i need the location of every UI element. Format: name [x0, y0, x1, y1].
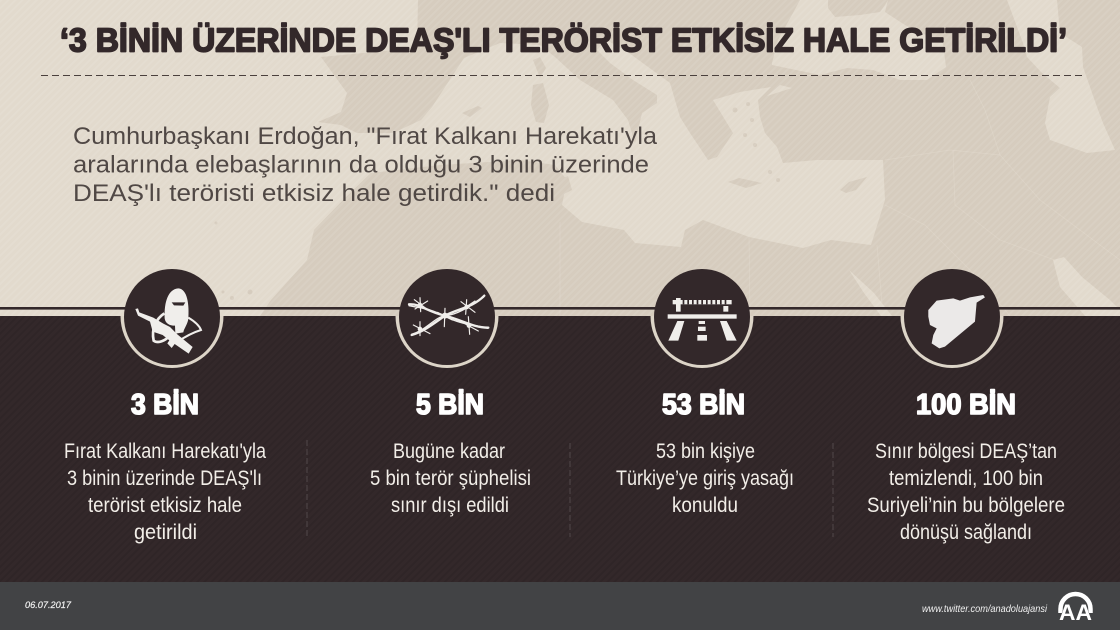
column 4: 100 BİN: 100 BİN	[916, 389, 1016, 421]
column 3: 53 BİN: konuldu	[672, 494, 738, 517]
column 4: 100 BİN: dönüşü sağlandı	[900, 521, 1032, 544]
column 1: 3 BİN: 3 binin üzerinde DEAŞ'lı	[67, 467, 262, 490]
column 1: 3 BİN: terörist etkisiz hale	[88, 494, 242, 517]
column 2: 5 BİN: 5 bin terör şüphelisi	[370, 467, 531, 490]
column 3: 53 BİN: Türkiye’ye giriş yasağı	[616, 467, 794, 490]
panel: map background	[0, 0, 1120, 316]
footer twitter address: www.twitter.com/anadoluajansi	[922, 603, 1048, 615]
icon: masked militant with rifle	[120, 269, 224, 368]
icon: barbed wire	[396, 269, 498, 368]
column 3: 53 BİN	[616, 389, 794, 517]
icon: road barrier	[650, 269, 754, 368]
intro paragraph: Cumhurbaşkanı Erdoğan, "Fırat Kalkanı Harekatı'yla	[73, 123, 658, 150]
panel: footer bar	[0, 582, 1120, 630]
column 4: 100 BİN: temizlendi, 100 bin	[889, 467, 1043, 490]
icon: Anadolu Agency logo: AA	[1059, 600, 1092, 625]
intro paragraph: aralarında elebaşlarının da olduğu 3 binin üzerinde	[73, 152, 649, 178]
intro paragraph	[73, 123, 658, 207]
column 2: 5 BİN	[370, 389, 531, 517]
column 3: 53 BİN: 53 BİN	[662, 389, 745, 421]
column 4: 100 BİN: Suriyeli’nin bu bölgelere	[867, 494, 1065, 517]
column 2: 5 BİN: sınır dışı edildi	[391, 494, 509, 517]
intro paragraph: DEAŞ'lı teröristi etkisiz hale getirdik." dedi	[73, 180, 555, 207]
column 1: 3 BİN: Fırat Kalkanı Harekatı'yla	[64, 440, 266, 463]
column 4: 100 BİN: Sınır bölgesi DEAŞ’tan	[875, 440, 1057, 463]
footer date: 06.07.2017	[25, 600, 72, 611]
title: ‘3 BİNİN ÜZERİNDE DEAŞ'LI TERÖRİST ETKİSİZ HALE GETİRİLDİ’	[60, 22, 1067, 58]
column 1: 3 BİN: getirildi	[134, 521, 197, 544]
column 1: 3 BİN: 3 BİN	[131, 389, 199, 421]
column 1: 3 BİN	[64, 389, 266, 544]
column 2: 5 BİN: Bugüne kadar	[393, 440, 505, 463]
column 3: 53 BİN: 53 bin kişiye	[656, 440, 755, 463]
column 2: 5 BİN: 5 BİN	[416, 389, 484, 421]
icon: map of Syria	[900, 269, 1004, 368]
column 4: 100 BİN	[867, 389, 1065, 544]
